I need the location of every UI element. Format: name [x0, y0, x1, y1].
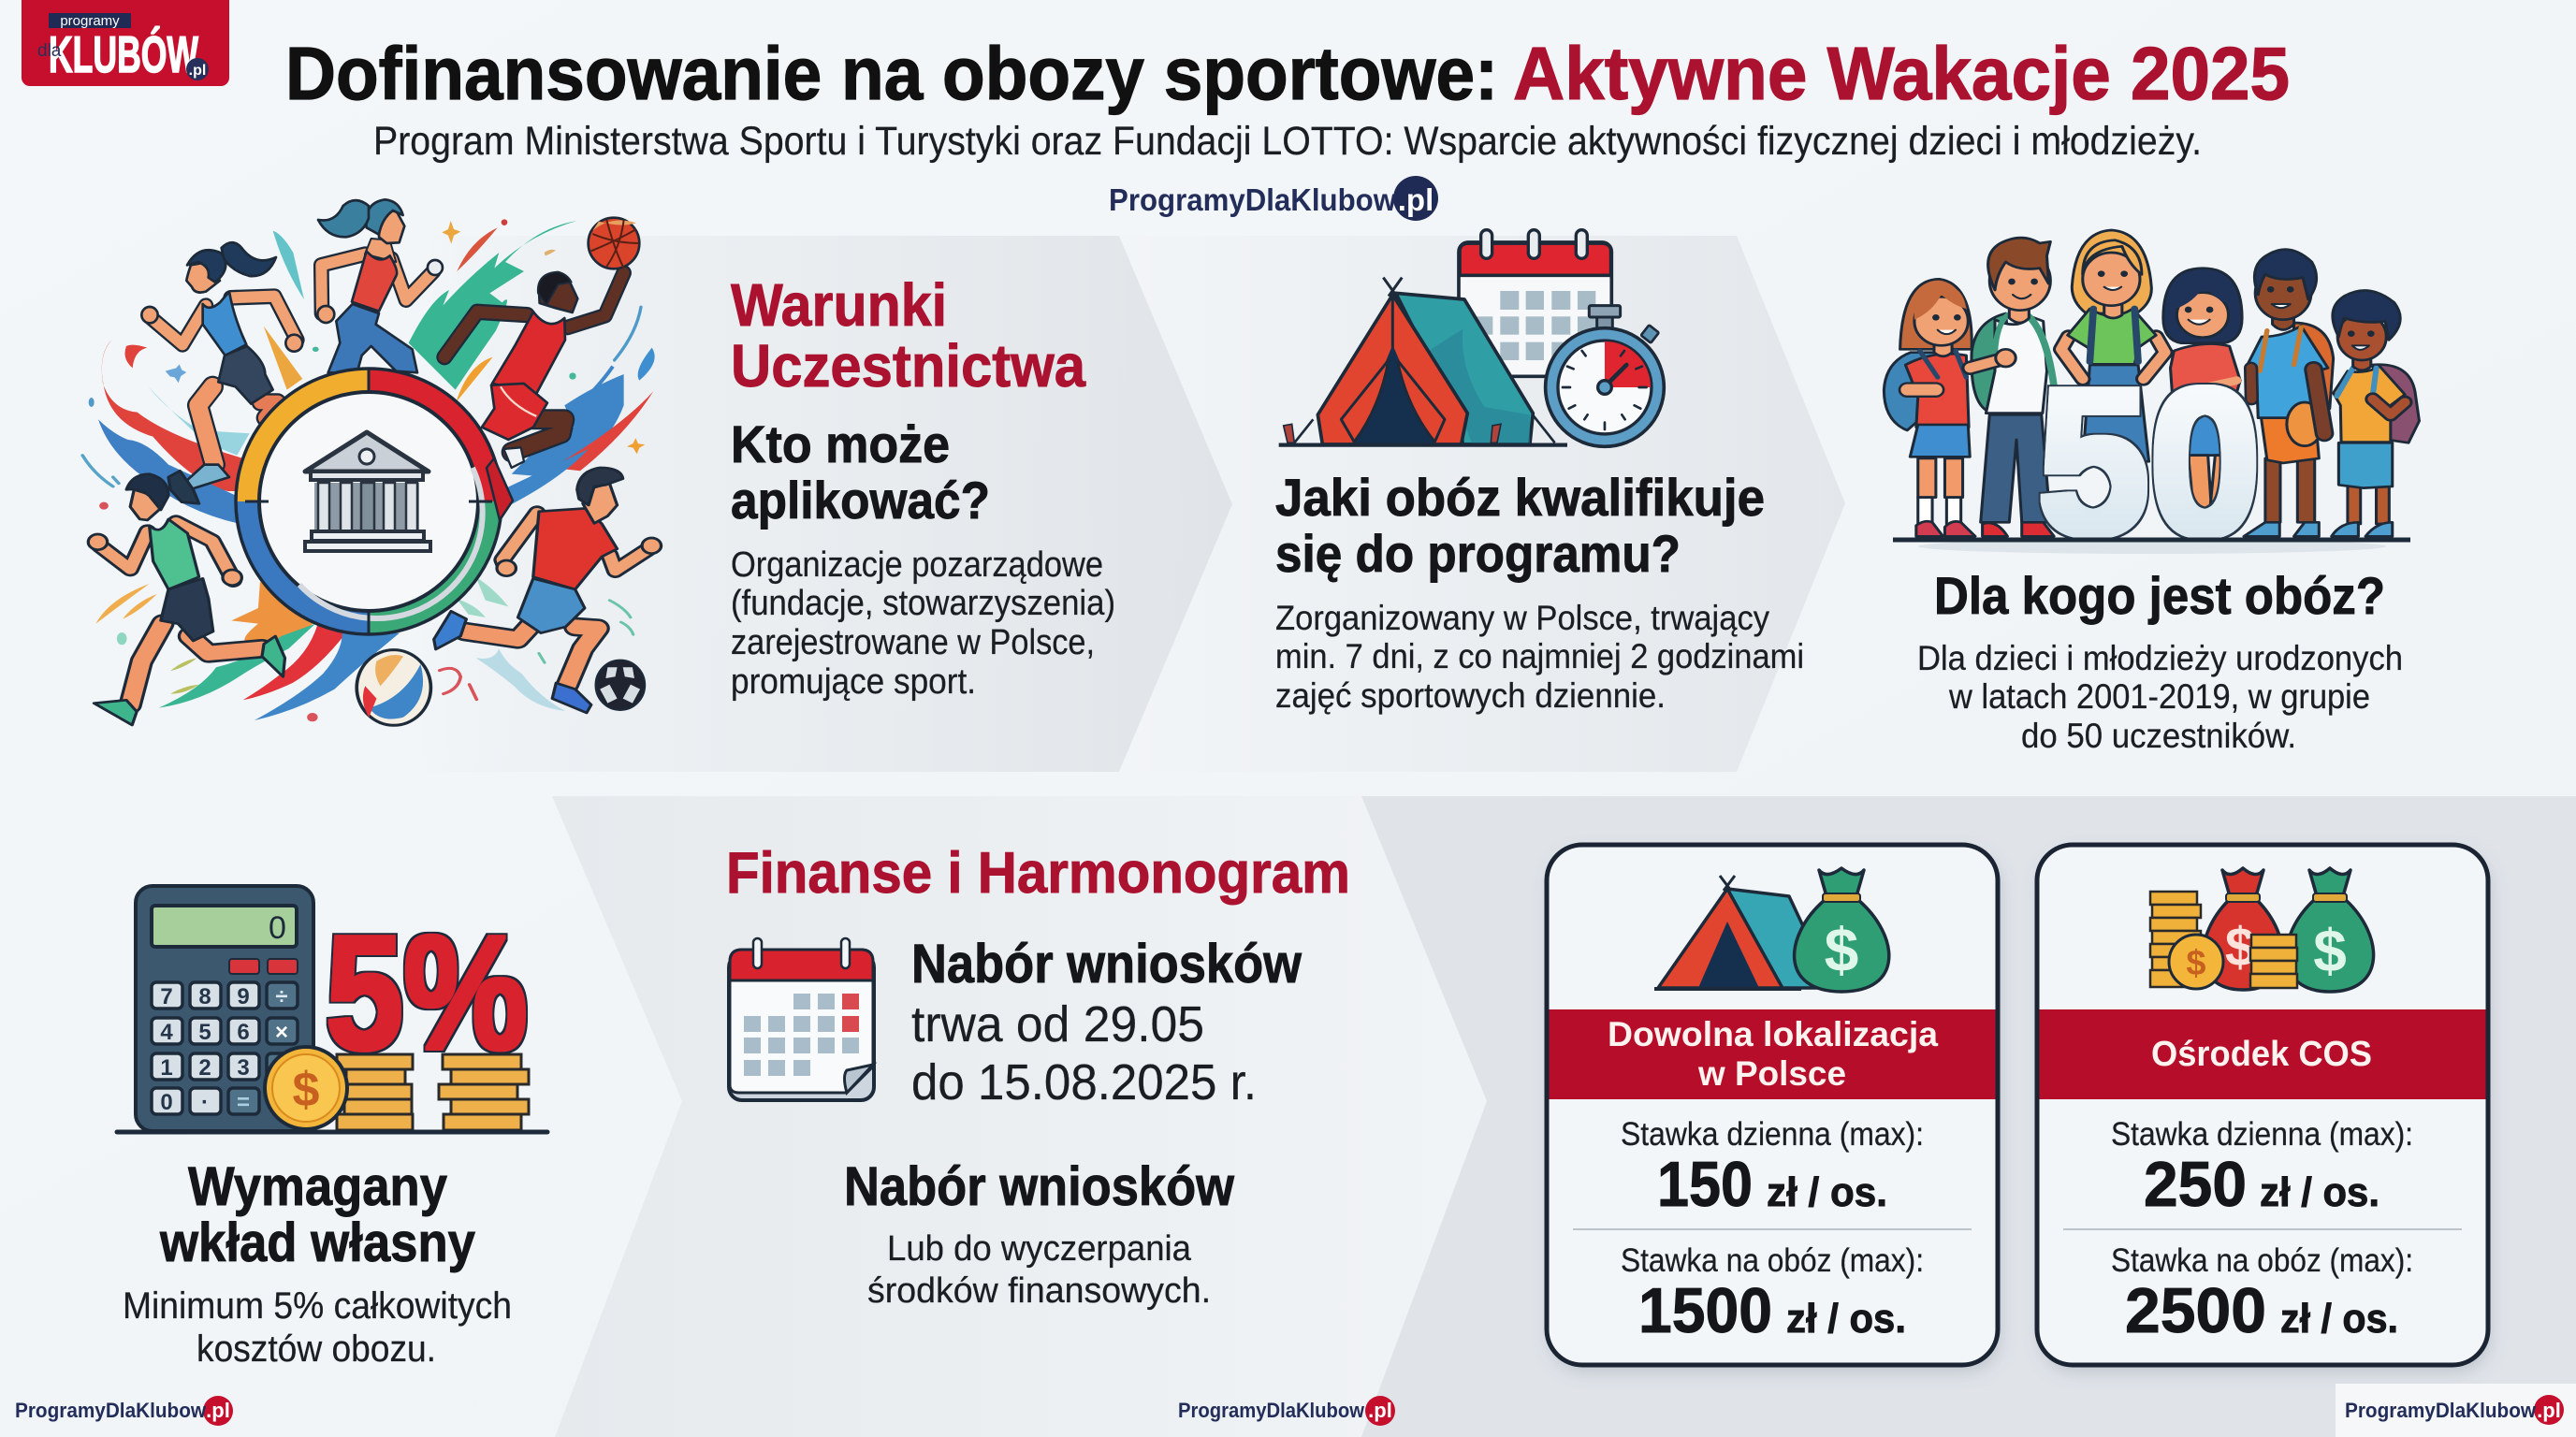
- number 50: 50: [2038, 346, 2261, 578]
- stopwatch: [1546, 306, 1664, 446]
- runner: green top: [88, 471, 284, 725]
- watermark: top centre: ProgramyDlaKlubow: [1109, 182, 1396, 217]
- text block: application dates: [911, 934, 1303, 1110]
- panel: top chevron 2: [1119, 236, 1845, 772]
- text block: which camp qualifies: Zorganizowany w Polsce, trwający: [1275, 599, 1769, 637]
- logo: programy dla klubów: dla: [37, 41, 62, 61]
- runner: blue top: [141, 242, 302, 489]
- text block: until funds run out: [844, 1156, 1235, 1311]
- calculator: 6: [237, 1020, 250, 1045]
- text block: until funds run out: środków finansowych.: [867, 1271, 1211, 1311]
- text block: which camp qualifies: min. 7 dni, z co najmniej 2 godzinami: [1275, 637, 1804, 675]
- panel: top chevron 1: [412, 236, 1232, 772]
- heading: finances and schedule: Finanse i Harmonogram: [726, 841, 1350, 906]
- band text: Dowolna lokalizacja: [1608, 1015, 1938, 1053]
- camp rate: Stawka na obóz (max):: [1621, 1242, 1924, 1279]
- logo: programy dla klubów: KLUBÓW: [49, 25, 198, 83]
- panel: card COS centre: 250: [2144, 1149, 2247, 1220]
- child 1: [1884, 279, 1975, 536]
- icon: money bags and coins: $: [2313, 917, 2347, 984]
- illustration: group of children with number 50: [1884, 230, 2419, 578]
- paint splashes: bottom: [82, 449, 633, 721]
- calculator: 2: [198, 1055, 211, 1081]
- text block: who can apply: (fundacje, stowarzyszenia): [731, 584, 1115, 623]
- child 3 behind: [2061, 230, 2165, 461]
- watermark: bottom centre: .pl: [1368, 1399, 1392, 1422]
- text block: who can apply: Kto może: [731, 414, 950, 473]
- watermark: bottom left: .pl: [206, 1399, 230, 1422]
- watermark: bottom right: [2336, 1384, 2576, 1437]
- red band: [1547, 1009, 1998, 1099]
- calculator: 0: [160, 1090, 173, 1115]
- ground shadow: [1918, 539, 2386, 554]
- text block: which camp qualifies: zajęć sportowych dziennie.: [1275, 676, 1666, 715]
- text block: who can apply: zarejestrowane w Polsce,: [731, 623, 1095, 662]
- daily rate: Stawka dzienna (max):: [2111, 1116, 2413, 1153]
- icon: money bags and coins: $: [2225, 917, 2255, 978]
- watermark: top centre: .pl: [1398, 182, 1434, 217]
- big 5%: 5%: [326, 901, 528, 1083]
- text block: conditions heading: Uczestnictwa: [731, 332, 1085, 399]
- title: Dofinansowanie na obozy sportowe:: [285, 32, 1498, 115]
- child 2: [1970, 238, 2054, 536]
- panel: card COS centre: zł / os.: [2260, 1169, 2380, 1215]
- text block: who is the camp for: w latach 2001-2019, w grupie: [1948, 677, 2370, 716]
- text block: own contribution: Minimum 5% całkowitych: [123, 1285, 512, 1327]
- text block: which camp qualifies: [1275, 468, 1804, 715]
- icon: volleyball: [357, 650, 430, 725]
- runner: red top: [317, 199, 443, 372]
- text block: who can apply: [731, 414, 1115, 702]
- watermark: bottom centre: ProgramyDlaKlubow: [1178, 1399, 1365, 1422]
- text block: conditions heading: [731, 271, 1085, 399]
- text block: who is the camp for: Dla kogo jest obóz?: [1934, 566, 2385, 625]
- panel: card any location: 1500: [1638, 1275, 1772, 1346]
- calculator: 3: [237, 1055, 250, 1081]
- panel: card any location: [1547, 845, 1998, 1365]
- panel: card COS centre: 2500: [2125, 1275, 2266, 1346]
- tent: [1279, 278, 1567, 445]
- gold coin: [265, 1047, 347, 1129]
- illustration: tent, calendar and stopwatch: [1279, 230, 1664, 446]
- calculator: 7: [160, 984, 173, 1009]
- calculator: 4: [160, 1020, 173, 1045]
- text block: which camp qualifies: się do programu?: [1275, 524, 1681, 583]
- calculator: ×: [275, 1020, 288, 1045]
- text block: until funds run out: Lub do wyczerpania: [887, 1229, 1192, 1269]
- panel: bottom chevron middle: [552, 796, 1487, 1437]
- text block: own contribution: Wymagany: [188, 1156, 447, 1217]
- calculator: 1: [160, 1055, 173, 1081]
- watermark: bottom right: ProgramyDlaKlubow: [2345, 1399, 2537, 1422]
- text block: application dates: do 15.08.2025 r.: [911, 1054, 1257, 1110]
- coin stacks: [337, 1054, 529, 1130]
- icon: football: [596, 660, 645, 710]
- text block: own contribution: [123, 1156, 512, 1370]
- paint splashes: right: [409, 219, 655, 477]
- child 5: [2244, 250, 2334, 536]
- panel: card any location: zł / os.: [1786, 1296, 1906, 1342]
- panel: card COS centre: [2037, 845, 2488, 1365]
- paint splashes: left: [89, 231, 319, 524]
- child 6: [2332, 291, 2419, 536]
- watermark: bottom left: ProgramyDlaKlubow: [15, 1399, 207, 1422]
- calculator: ÷: [275, 984, 288, 1009]
- icon: calendar: [729, 938, 874, 1100]
- children: [1884, 230, 2419, 536]
- icon: tent and money bag: [1654, 868, 1889, 992]
- text block: until funds run out: Nabór wniosków: [844, 1156, 1235, 1217]
- text block: own contribution: wkład własny: [159, 1212, 475, 1273]
- watermark: bottom right: .pl: [2537, 1399, 2561, 1422]
- title: [285, 32, 2290, 115]
- illustration: calculator with 5% and coins: [117, 886, 547, 1132]
- child 4 behind: [2163, 269, 2242, 512]
- gold coin: $: [293, 1063, 320, 1117]
- text block: who is the camp for: Dla dzieci i młodzieży urodzonych: [1917, 639, 2403, 677]
- subtitle: Program Ministerstwa Sportu i Turystyki oraz Fundacji LOTTO: Wsparcie aktywności fizycznej dzieci i młodzieży.: [373, 119, 2202, 164]
- text block: application dates: Nabór wniosków: [911, 934, 1303, 994]
- calculator: 9: [237, 984, 250, 1009]
- calculator: 0: [269, 910, 286, 946]
- text block: conditions heading: Warunki: [731, 271, 947, 339]
- camp rate: Stawka na obóz (max):: [2111, 1242, 2413, 1279]
- ring: [236, 369, 513, 634]
- calculator: ·: [201, 1090, 209, 1115]
- logo: programy dla klubów: [22, 0, 229, 86]
- logo: programy dla klubów: .pl: [189, 63, 206, 79]
- panel: card any location: zł / os.: [1767, 1169, 1887, 1215]
- panel: card any location: w Polsce: [1697, 1054, 1846, 1093]
- panel: bottom band right: [1310, 796, 2576, 1437]
- panel: card COS centre: zł / os.: [2280, 1296, 2398, 1342]
- logo: programy dla klubów: programy: [60, 13, 120, 29]
- text block: who is the camp for: do 50 uczestników.: [2021, 717, 2296, 755]
- daily rate: Stawka dzienna (max):: [1621, 1116, 1924, 1153]
- runner: basketball player: [444, 218, 639, 468]
- calculator: 8: [198, 984, 211, 1009]
- calculator: 5: [198, 1020, 211, 1045]
- icon: tent and money bag: $: [1825, 915, 1858, 984]
- runner: red shirt: [434, 468, 662, 713]
- icon: money bags and coins: [2150, 868, 2374, 992]
- text block: who can apply: aplikować?: [731, 471, 990, 530]
- calculator: =: [237, 1090, 250, 1115]
- red band: [2037, 1009, 2488, 1099]
- text block: application dates: trwa od 29.05: [911, 996, 1204, 1052]
- calculator: [136, 886, 313, 1131]
- text block: own contribution: kosztów obozu.: [196, 1328, 436, 1370]
- text block: who can apply: promujące sport.: [731, 662, 976, 702]
- title: Aktywne Wakacje 2025: [1513, 32, 2290, 115]
- text block: which camp qualifies: Jaki obóz kwalifikuje: [1275, 468, 1765, 527]
- panel: card any location: 150: [1657, 1149, 1753, 1220]
- illustration: athletes around ring: [82, 199, 662, 725]
- text block: who can apply: Organizacje pozarządowe: [731, 545, 1103, 585]
- band text: Ośrodek COS: [2151, 1035, 2372, 1074]
- calendar: [1459, 230, 1611, 376]
- icon: institution building: [305, 432, 430, 551]
- text block: who is the camp for: [1917, 566, 2403, 755]
- icon: money bags and coins: $: [2186, 944, 2206, 983]
